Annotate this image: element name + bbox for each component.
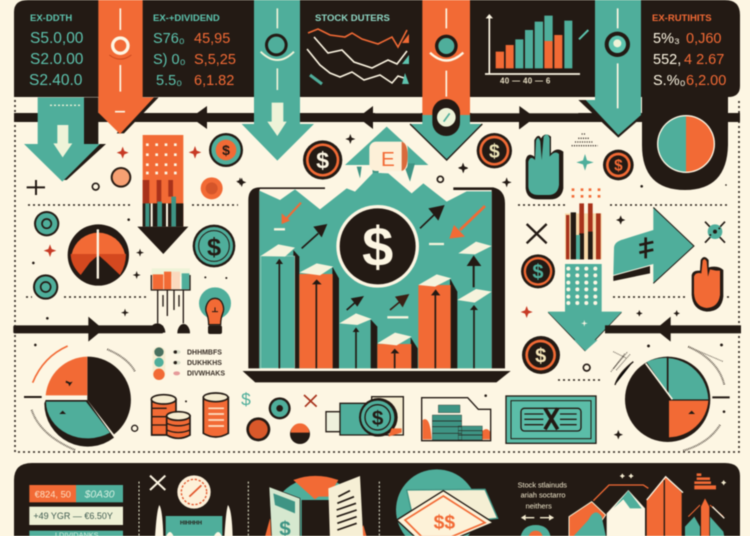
pie chart: right: [611, 347, 730, 451]
coin: dark dollar: [521, 254, 555, 288]
document with stacked notes: [422, 398, 491, 441]
icon: teal splat with cross: [705, 222, 725, 243]
arrow: teal left: [24, 97, 106, 182]
top dark panel: [14, 0, 740, 190]
coin: teal small lower: [33, 274, 58, 300]
bar: teal first: [261, 244, 299, 368]
coin: middle: $: [535, 346, 546, 368]
text block: ex-rutihits: 5%₃: [653, 31, 680, 47]
icon: teal dollar glyph: $: [241, 390, 251, 410]
text block: ex-ddth: [29, 13, 84, 89]
mini bar chart: [151, 268, 190, 323]
text block: ex-ddth: EX-DDTH: [30, 13, 72, 24]
text block: ex-rutihits: EX-RUTIHITS: [652, 13, 712, 24]
center dollar coin: [336, 205, 419, 288]
center dollar coin: $: [362, 215, 393, 278]
arrow: teal dotted down: [548, 264, 622, 351]
arrow: long left: [605, 317, 741, 342]
icon: orange hand: [692, 257, 723, 312]
bars: falling column: [565, 188, 602, 259]
heading: stock duters: STOCK DUTERS: [315, 13, 390, 24]
banknote: teal: [506, 396, 596, 443]
section: banknote stack with coin: [326, 403, 376, 435]
rising arrows chart: [569, 473, 726, 536]
text block: ex-dividend: [153, 13, 236, 89]
icon: plus: [27, 180, 45, 195]
icon: dotted triangle: [572, 134, 598, 146]
icon: light bulb: [199, 287, 231, 334]
section: right column: [521, 184, 741, 374]
section: bottom panel right: [379, 469, 726, 536]
text block: ex-dividend: EX-+DIVIDEND: [153, 13, 220, 24]
legend: [153, 347, 225, 380]
screen teal area: [259, 173, 492, 368]
text block: ex-ddth: S5.0,00: [30, 30, 84, 47]
section: left column: [13, 135, 244, 346]
icon: ring: [92, 183, 99, 190]
section: top left: [24, 0, 355, 188]
coin with notes: [359, 397, 403, 437]
bar: orange second: [299, 263, 339, 368]
icons: red sparkles: [117, 146, 201, 159]
icon: teal round key: [520, 525, 551, 536]
small dashes: [613, 347, 723, 362]
arrow: teal right: [578, 0, 642, 138]
text block: stock note: ariah soctarro: [521, 490, 565, 499]
icon: teal star: [576, 154, 594, 171]
legend: DUKHKHS: [187, 360, 222, 367]
text block: ex-rutihits: 6,2.00: [686, 73, 726, 89]
icon: black sparkle: [458, 163, 468, 173]
bar: orange fourth: [377, 333, 418, 368]
icon: x mark: [150, 476, 165, 490]
text block: ex-rutihits: 4 2.67: [684, 52, 724, 68]
text block: ex-dividend: 45,95: [194, 31, 230, 47]
text block: stock note: Stock stlainuds: [518, 480, 567, 489]
text block: ex-dividend: S) 0₀: [153, 52, 186, 68]
coin: dollar middle: [477, 133, 512, 168]
icons: marks: [484, 344, 725, 439]
coin: orange: [201, 177, 223, 199]
ticket rows: $0A30: [84, 490, 115, 501]
section: bottom panel left: [29, 475, 367, 536]
icon: ring: [583, 364, 590, 371]
arrow tip: [574, 340, 598, 351]
icon: cash and diamond note: [396, 469, 498, 536]
icon: x mark: [527, 224, 547, 243]
coin with notes: $: [372, 407, 384, 430]
legend: DHHMBFS: [187, 350, 222, 357]
text block: ex-ddth: S2.0.00: [30, 51, 84, 68]
bar stack: orange falling: [137, 135, 188, 254]
text block: ex-ddth: S2.40.0: [29, 72, 83, 89]
coin: small orange: [111, 167, 131, 188]
screen base: [242, 371, 512, 383]
text block: ex-dividend: 6,1.82: [194, 73, 234, 89]
text block: stock note: [518, 480, 567, 521]
coin: bottom dollar: [522, 336, 560, 374]
small decorations: [237, 163, 512, 187]
arrow: teal right-pointing: [613, 207, 694, 283]
coin: teal ring: $: [222, 142, 230, 158]
coin: dollar: $: [316, 147, 329, 173]
icon: black sparkle: [345, 134, 355, 144]
text block: ex-rutihits: 0,J60: [686, 31, 721, 47]
arrow: long dark timeline: [13, 317, 190, 342]
icon: red star: [521, 306, 533, 318]
ticket rows: €824, 50: [35, 489, 71, 499]
timeline line with arrowheads: [14, 106, 740, 129]
icon: documents on circle: [265, 476, 367, 536]
coin: bottom dollar: $: [535, 345, 547, 368]
line chart: stock lines: [307, 29, 409, 84]
icon: coin stacks: [151, 393, 228, 438]
section: center chart screen: [237, 127, 512, 383]
section: top right arrows and pie: [375, 0, 715, 199]
coin: dark dollar: $: [532, 262, 544, 284]
icon: mountain banner with E: [345, 127, 428, 193]
coin: right: [603, 150, 634, 180]
coin: dollar middle: $: [489, 142, 500, 163]
bar: orange fifth: [418, 274, 457, 368]
icons: small plus marks: [32, 177, 244, 346]
pie chart: two halves: [657, 115, 715, 173]
icon: gauge: [177, 475, 211, 509]
icon: cash and diamond note: $$: [434, 513, 455, 534]
screen frame: [248, 187, 505, 368]
section: lower right: [359, 337, 730, 451]
text block: ex-rutihits: [652, 13, 726, 89]
coin: teal small: [34, 211, 59, 236]
section: lower left: [24, 346, 317, 450]
coin: large teal dollar: [193, 225, 235, 267]
legend: DIVWHAKS: [187, 370, 225, 377]
text block: ex-dividend: 5.5₀: [156, 73, 182, 89]
ticket rows: +49 YGR — €6.50Y: [33, 511, 113, 521]
arrow: orange with capsule: [375, 0, 588, 160]
arrows: in-screen: [274, 203, 485, 317]
icon: mountain banner with E: E: [381, 148, 395, 171]
coin: middle: [522, 337, 559, 373]
bottom dark panel: [14, 463, 740, 536]
icon: teal hand: [526, 135, 563, 199]
icons: marks: [616, 184, 727, 347]
pie chart: left: [24, 346, 135, 450]
coin: large teal dollar: $: [207, 233, 221, 261]
arrow: orange: [98, 0, 159, 134]
icon: ring: [437, 176, 443, 182]
section: bar chart: 40 — 40 — 6: [500, 77, 551, 86]
icon: teal tablet with hands: HIHHHH: [180, 520, 202, 526]
text block: ex-dividend: S76₀: [153, 31, 185, 47]
coin: teal ring: [209, 133, 243, 167]
icon: red star: [44, 244, 56, 257]
text block: ex-rutihits: 552,: [653, 52, 681, 68]
coins: scatter: [132, 395, 317, 444]
arrow: teal second: [242, 0, 314, 161]
bar: teal third: [339, 313, 377, 368]
section: bar chart: [485, 14, 588, 86]
coin: dollar: [303, 140, 342, 180]
text block: stock note: neithers: [526, 502, 552, 511]
icon: teal tablet with hands: [155, 505, 233, 536]
bar: teal sixth: [457, 242, 492, 368]
coin: right: $: [614, 158, 623, 175]
text block: ex-rutihits: S.%₀: [653, 73, 686, 89]
text block: ex-dividend: S,5,25: [194, 52, 236, 68]
ticket rows: [29, 485, 123, 536]
gauge chart: [68, 224, 129, 286]
